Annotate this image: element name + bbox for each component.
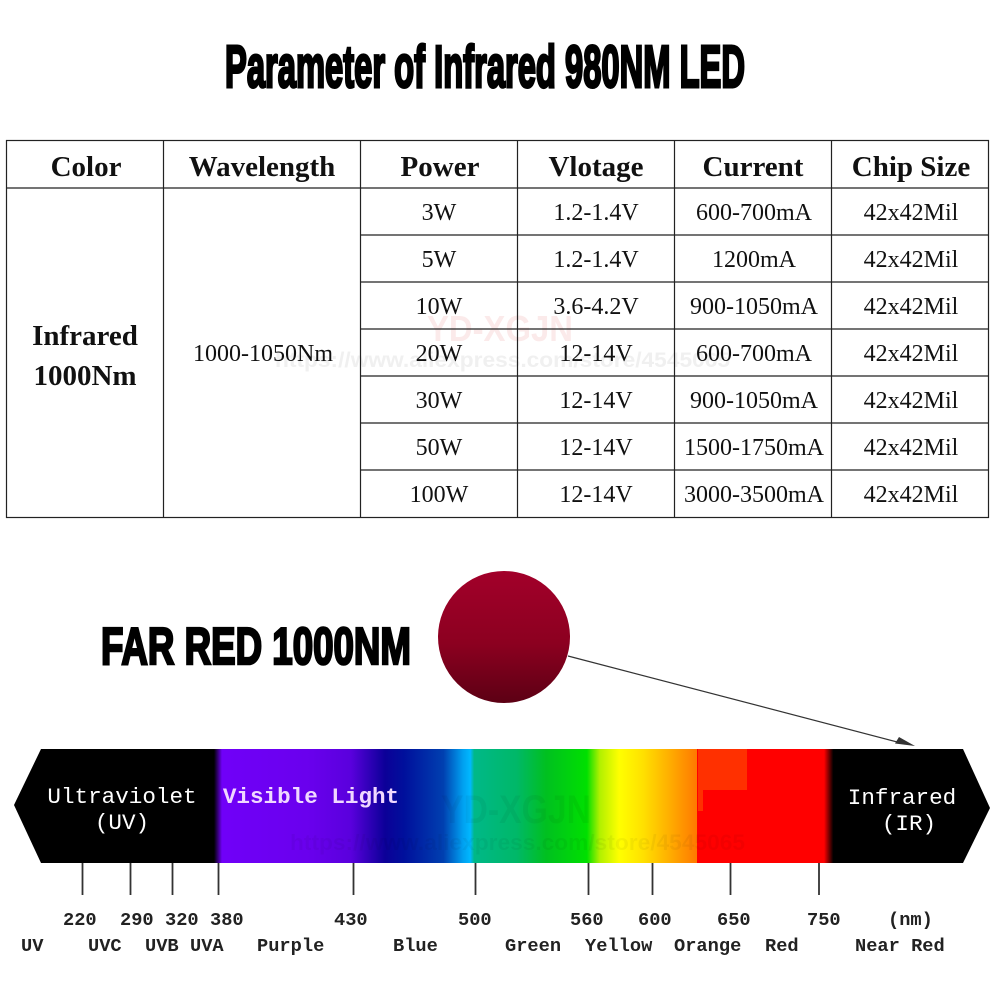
- colour band names: Red: [765, 935, 799, 957]
- table rows: 600-700mA: [696, 341, 813, 367]
- table rows: 42x42Mil: [864, 435, 959, 461]
- colour band names: Purple: [257, 935, 324, 957]
- table rows: 10W: [416, 294, 463, 320]
- spectrum watermark: YD-XGJN: [441, 788, 591, 832]
- table rows: 1200mA: [712, 247, 797, 273]
- wavelength scale: 650: [717, 909, 751, 931]
- table watermark: YD-XGJN: [427, 308, 573, 349]
- table rows: 42x42Mil: [864, 341, 959, 367]
- colour band names: Green: [505, 935, 561, 957]
- table rows: 20W: [416, 341, 463, 367]
- far red label: FAR RED 1000NM: [101, 618, 411, 676]
- colour band names: UV: [21, 935, 44, 957]
- table rows: 1.2-1.4V: [553, 247, 639, 273]
- parameter table: [6, 140, 989, 518]
- spectrum watermark: https://www.aliexpress.com/store/4545065: [290, 830, 745, 855]
- table rows: 42x42Mil: [864, 247, 959, 273]
- wavelength scale: 750: [807, 909, 841, 931]
- table rows: 1500-1750mA: [684, 435, 825, 461]
- far red colour ball: [438, 571, 570, 703]
- color cell: Infrared: [32, 320, 138, 352]
- colour band names: Orange: [674, 935, 741, 957]
- table rows: 42x42Mil: [864, 294, 959, 320]
- infrared label: Infrared: [848, 785, 956, 811]
- red patch: [698, 749, 747, 811]
- table rows: 42x42Mil: [864, 482, 959, 508]
- table header: Current: [703, 151, 804, 183]
- table rows: 12-14V: [559, 482, 633, 508]
- wavelength scale: 600: [638, 909, 672, 931]
- ultraviolet label: [47, 784, 197, 836]
- colour band names: UVB: [145, 935, 179, 957]
- table rows: 30W: [416, 388, 463, 414]
- table rows: 900-1050mA: [690, 294, 819, 320]
- table rows: 12-14V: [559, 388, 633, 414]
- wavelength scale: 430: [334, 909, 368, 931]
- table header: Power: [401, 151, 480, 183]
- table rows: 100W: [410, 482, 469, 508]
- table rows: 12-14V: [559, 435, 633, 461]
- infrared label: [848, 785, 956, 837]
- table rows: 3W: [422, 200, 457, 226]
- table rows: 3000-3500mA: [684, 482, 825, 508]
- wavelength scale: 380: [210, 909, 244, 931]
- table rows: 50W: [416, 435, 463, 461]
- tick marks: [82, 863, 819, 895]
- colour band names: UVC: [88, 935, 122, 957]
- spectrum bar: [14, 749, 990, 863]
- wavelength scale: 500: [458, 909, 492, 931]
- wavelength cell: 1000-1050Nm: [193, 341, 333, 367]
- table rows: 600-700mA: [696, 200, 813, 226]
- table rows: 1.2-1.4V: [553, 200, 639, 226]
- wavelength scale: 320: [165, 909, 199, 931]
- table header: [51, 151, 970, 183]
- colour band names: [21, 935, 945, 957]
- infrared label: (IR): [882, 811, 936, 837]
- visible light label: Visible Light: [223, 784, 399, 810]
- table rows: 42x42Mil: [864, 388, 959, 414]
- wavelength scale: 220: [63, 909, 97, 931]
- table header: Color: [51, 151, 122, 183]
- colour band names: UVA: [190, 935, 224, 957]
- colour band names: Blue: [393, 935, 438, 957]
- table rows: 900-1050mA: [690, 388, 819, 414]
- table rows: 5W: [422, 247, 457, 273]
- color cell: [32, 320, 138, 392]
- wavelength scale: (nm): [888, 909, 933, 931]
- table header: Wavelength: [189, 151, 335, 183]
- table rows: 12-14V: [559, 341, 633, 367]
- wavelength scale: [63, 909, 933, 931]
- table header: Chip Size: [852, 151, 970, 183]
- ultraviolet label: Ultraviolet: [47, 784, 197, 810]
- table watermark: https://www.aliexpress.com/store/4545065: [275, 349, 730, 372]
- table rows: 3.6-4.2V: [553, 294, 639, 320]
- spectrum watermark: [290, 788, 745, 855]
- wavelength scale: 560: [570, 909, 604, 931]
- colour band names: Near Red: [855, 935, 945, 957]
- color cell: 1000Nm: [33, 360, 137, 392]
- arrow from ball to infrared: [568, 656, 915, 746]
- table watermark: [275, 308, 730, 372]
- table rows: 42x42Mil: [864, 200, 959, 226]
- colour band names: Yellow: [585, 935, 653, 957]
- wavelength scale: 290: [120, 909, 154, 931]
- table rows: [410, 200, 959, 508]
- table header: Vlotage: [548, 151, 644, 183]
- ultraviolet label: (UV): [95, 810, 149, 836]
